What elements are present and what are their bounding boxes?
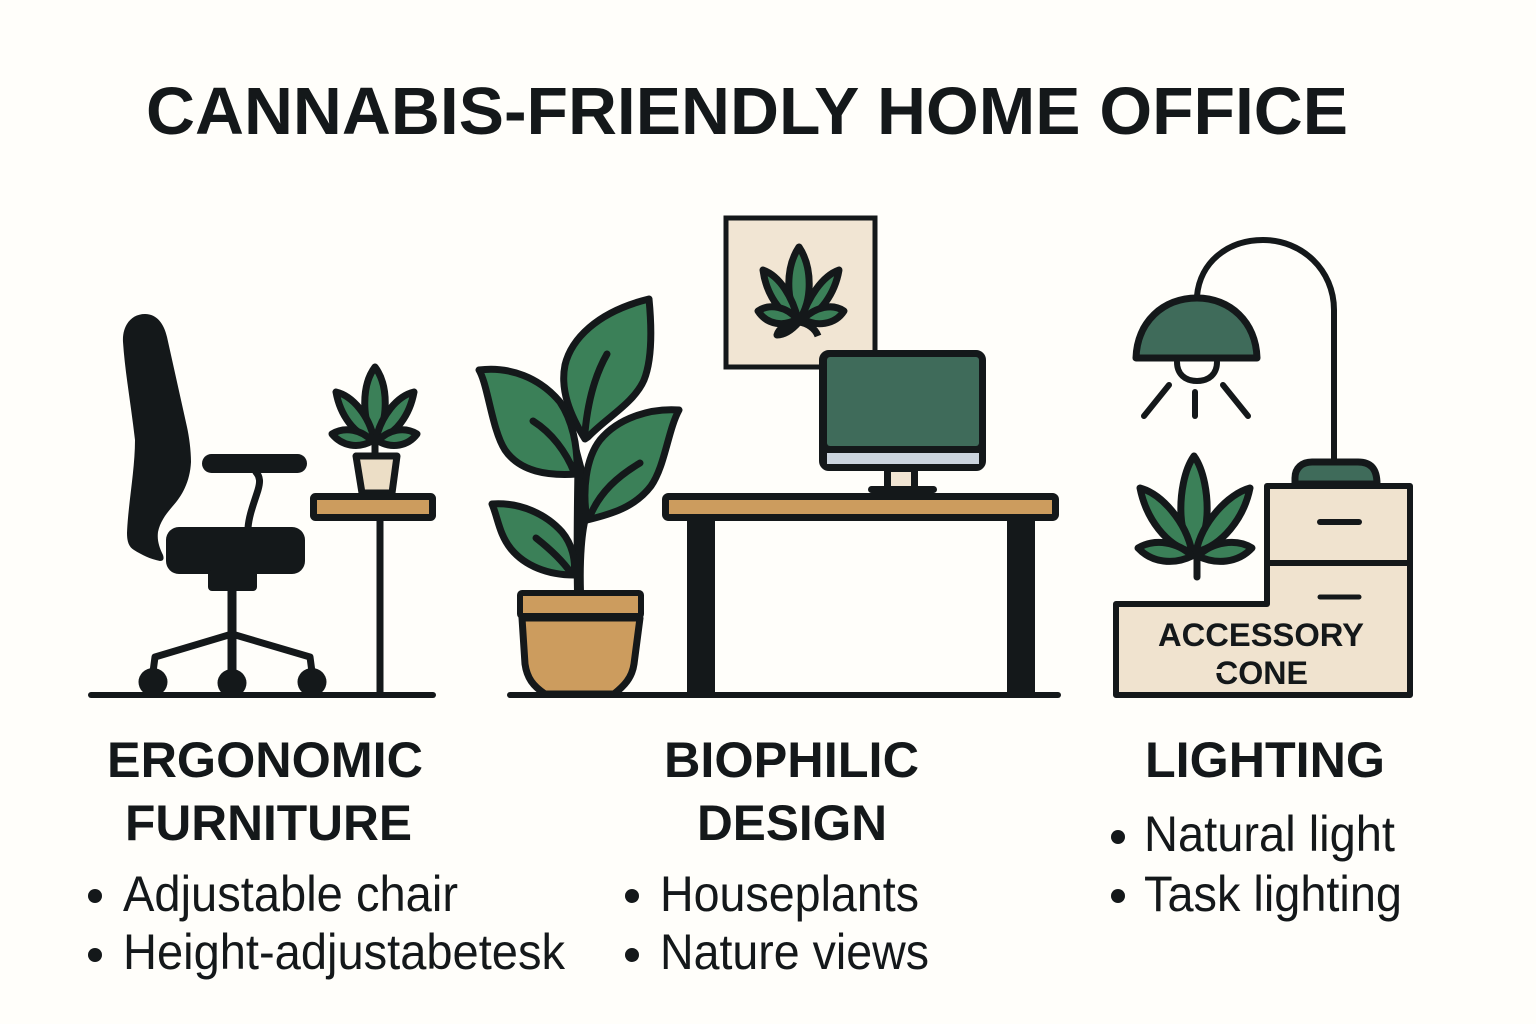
heading: ergonomic furniture: FURNITURE [125, 795, 412, 851]
icon: large potted houseplant [479, 299, 679, 694]
heading: biophilic design [664, 732, 919, 851]
text block: lighting [1111, 732, 1402, 922]
icon: small potted cannabis plant [332, 367, 417, 493]
heading: ergonomic furniture: ERGONOMIC [107, 732, 423, 788]
heading: biophilic design: BIOPHILIC [664, 732, 919, 788]
list: ergonomic items: Adjustable chair [123, 866, 458, 922]
panel: lighting illustration [1116, 240, 1410, 695]
title: CANNABIS-FRIENDLY HOME OFFICE [146, 74, 1348, 149]
floor line: desk [510, 692, 1058, 698]
cabinet label: CONE [1215, 655, 1308, 691]
heading: biophilic design: DESIGN [697, 795, 887, 851]
cabinet label [1158, 617, 1364, 691]
icon: wall art with cannabis leaf [726, 218, 875, 367]
icon: desk [666, 496, 1056, 693]
list: biophilic items [625, 866, 929, 980]
heading: ergonomic furniture [107, 732, 423, 851]
panel: ergonomic furniture illustration [91, 314, 433, 697]
icon: office chair [123, 314, 326, 697]
text block: ergonomic furniture [88, 732, 566, 980]
icon: filing cabinet [1116, 486, 1410, 695]
floor line: furniture [91, 692, 433, 698]
icon: desk lamp [1136, 240, 1377, 484]
list: lighting items: Natural light [1144, 806, 1395, 862]
text block: biophilic design [625, 732, 929, 980]
icon: computer monitor [821, 352, 984, 493]
list: ergonomic items: Height-adjustabetesk [123, 924, 566, 980]
list: biophilic items: Nature views [660, 924, 929, 980]
panel: biophilic design illustration [479, 218, 1058, 695]
heading: lighting: LIGHTING [1145, 732, 1385, 788]
list: lighting items [1111, 806, 1402, 922]
list: ergonomic items [88, 866, 566, 980]
list: biophilic items: Houseplants [660, 866, 919, 922]
icon: side table [314, 496, 432, 693]
cabinet label: ACCESSORY [1158, 617, 1364, 653]
list: lighting items: Task lighting [1144, 866, 1402, 922]
icon: cannabis plant [1138, 456, 1252, 577]
